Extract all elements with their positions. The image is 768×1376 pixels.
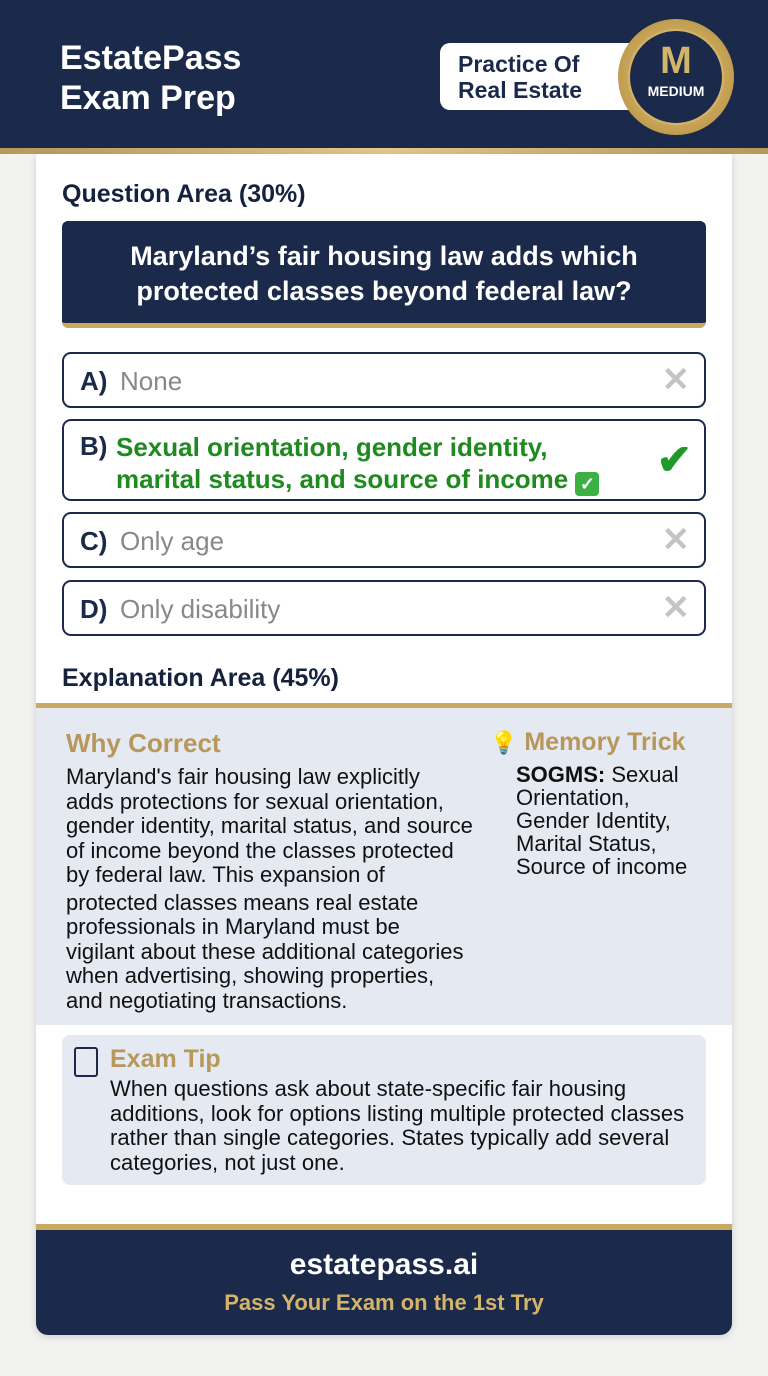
why correct: and negotiating transactions. [66, 988, 347, 1012]
option A: A) [80, 366, 107, 396]
why correct: adds protections for sexual orientation, [66, 788, 444, 814]
memory trick: Source of income [516, 854, 687, 879]
title: EstatePass [60, 39, 241, 77]
why correct: gender identity, marital status, and source [66, 813, 473, 838]
heading: question area: Question Area (30%) [62, 180, 306, 208]
memory trick: SOGMS: Sexual [516, 762, 679, 787]
memory trick: Gender Identity, [516, 808, 671, 833]
option C [62, 512, 706, 568]
option A [62, 352, 706, 408]
option B correct: ✔ [657, 436, 692, 483]
option C: Only age [120, 526, 224, 556]
option D [62, 580, 706, 636]
exam tip box: rather than single categories. States typically add several [110, 1125, 669, 1150]
card [36, 154, 732, 1335]
option C: C) [80, 526, 107, 556]
memory trick: 💡 Memory Trick [490, 728, 686, 756]
why correct: of income beyond the classes protected [66, 838, 454, 862]
why correct: Maryland's fair housing law explicitly [66, 764, 420, 789]
badge: medium: M [660, 40, 692, 82]
pill: category [440, 43, 650, 110]
badge: medium: MEDIUM [648, 83, 704, 99]
option B correct: B) [80, 431, 107, 461]
option A: None [120, 366, 182, 396]
footer: estatepass.ai [290, 1248, 478, 1281]
badge: medium [618, 19, 734, 135]
why correct: by federal law. This expansion of [66, 862, 385, 887]
pill: category: Practice Of [458, 51, 579, 77]
exam tip box: categories, not just one. [110, 1150, 345, 1174]
exam tip box [62, 1035, 706, 1185]
exam tip box: When questions ask about state-specific fair housing [110, 1076, 626, 1101]
why correct: Why Correct [66, 728, 221, 758]
why correct: protected classes means real estate [66, 890, 418, 914]
explanation panel [36, 703, 732, 1025]
memory trick: Marital Status, [516, 831, 657, 856]
option C: ✕ [662, 521, 690, 559]
footer [36, 1224, 732, 1335]
why correct [66, 728, 473, 1012]
option D: D) [80, 594, 107, 624]
question box: Maryland’s fair housing law adds which [130, 241, 638, 271]
header [0, 0, 768, 148]
option D: Only disability [120, 594, 280, 624]
option B correct: ✓ [580, 474, 595, 494]
option B correct: marital status, and source of income [116, 464, 568, 494]
option A: ✕ [662, 361, 690, 399]
title: Exam Prep [60, 79, 236, 117]
memory trick: Orientation, [516, 785, 630, 810]
option D: ✕ [662, 589, 690, 627]
footer: Pass Your Exam on the 1st Try [224, 1290, 544, 1315]
heading: explanation area: Explanation Area (45%) [62, 664, 339, 692]
option B correct [62, 419, 706, 501]
exam tip box: additions, look for options listing multiple protected classes [110, 1100, 684, 1126]
why correct: professionals in Maryland must be [66, 914, 400, 939]
question box [62, 221, 706, 328]
memory trick [490, 728, 687, 879]
option B correct: Sexual orientation, gender identity, [116, 432, 547, 462]
question box: protected classes beyond federal law? [136, 276, 632, 306]
exam tip box: Exam Tip [110, 1045, 221, 1073]
why correct: when advertising, showing properties, [66, 963, 434, 988]
pill: category: Real Estate [458, 77, 582, 103]
title [60, 39, 241, 117]
icon: clipboard [74, 1047, 98, 1077]
why correct: vigilant about these additional categories [66, 938, 464, 964]
